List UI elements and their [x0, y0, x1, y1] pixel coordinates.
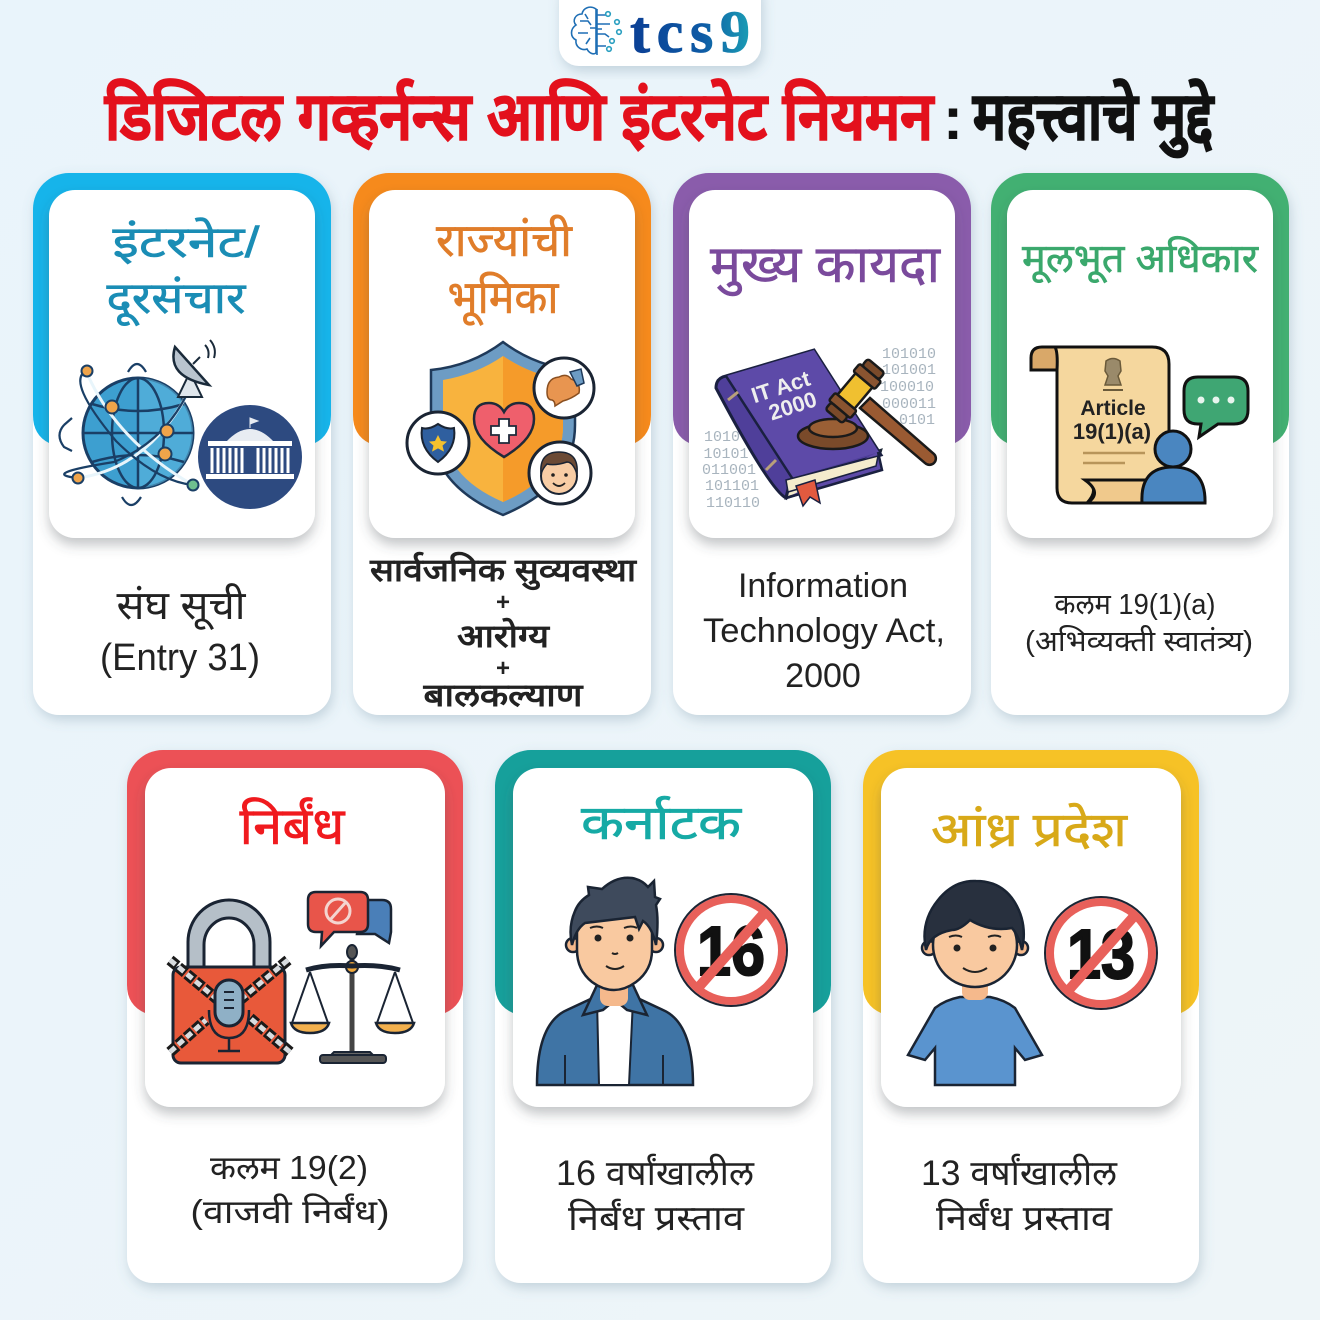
label: union list [100, 583, 260, 679]
title: : [943, 85, 963, 152]
icon: binary digits: 110110 [706, 495, 760, 512]
heading: internet telecom [106, 217, 260, 326]
icon: binary digits: 101010 [882, 346, 936, 363]
icon: binary digits: 101101 [705, 478, 759, 495]
heading: role of states: राज्यांची [436, 214, 573, 266]
icon: binary digits: 011001 [702, 462, 756, 479]
label: public order, health, child welfare [369, 551, 638, 713]
label: article 19(2) [190, 1149, 390, 1230]
icon: shield with heart [407, 342, 594, 515]
label: under 13 proposal: 13 वर्षांखालील [921, 1153, 1118, 1193]
heading: fundamental rights: मूलभूत अधिकार [1022, 236, 1259, 283]
icon: child [529, 442, 591, 504]
title: महत्त्वाचे मुद्दे [971, 78, 1215, 158]
panel: restrictions [127, 750, 463, 1283]
label: under 13 proposal: निर्बंध प्रस्ताव [936, 1198, 1113, 1238]
icon: speech bubble [1184, 377, 1248, 437]
label: under 16 proposal: 16 वर्षांखालील [556, 1153, 755, 1193]
icon: globe and satellite [60, 340, 215, 505]
icon: binary digits: 10101 [703, 446, 749, 463]
label: public order, health, child welfare: बालकल्याण [422, 677, 585, 713]
heading: restrictions: निर्बंध [240, 797, 346, 856]
icon: health [534, 358, 594, 418]
heading: role of states: भूमिका [448, 271, 560, 326]
icon: article scroll [1031, 347, 1169, 503]
logo [559, 0, 761, 66]
icon: article scroll: Article [1080, 397, 1146, 420]
icon: gavel [798, 357, 936, 465]
icon: police badge [407, 412, 469, 474]
icon: no under 16 [675, 894, 787, 1006]
icon: blocked speech bubbles [308, 892, 391, 946]
heading: internet telecom: दूरसंचार [106, 274, 247, 326]
title: डिजिटल गव्हर्नन्स आणि इंटरनेट नियमन [103, 78, 935, 153]
icon: law book [716, 350, 882, 506]
heading: andhra pradesh: आंध्र प्रदेश [931, 802, 1128, 857]
label: IT act: Technology Act, [703, 612, 945, 650]
label: public order, health, child welfare: सार्वजनिक सुव्यवस्था [369, 551, 638, 591]
label: under 13 proposal [921, 1153, 1118, 1238]
icon: law book: IT Act [748, 365, 814, 408]
label: public order, health, child welfare: आरोग्य [457, 617, 551, 654]
label: under 16 proposal: निर्बंध प्रस्ताव [568, 1198, 745, 1238]
label: IT act [703, 567, 945, 695]
label: article 19(1)(a) [1025, 589, 1253, 658]
icon: child [908, 881, 1042, 1085]
icon: parliament [198, 405, 302, 509]
heading: karnataka: कर्नाटक [581, 795, 742, 850]
icon: no under 16: 16 [697, 912, 765, 990]
icon: binary digits [702, 346, 936, 512]
icon: binary digits: 1010 [704, 429, 740, 446]
icon: binary digits: 000011 [882, 396, 936, 413]
icon: binary digits: 100010 [880, 379, 934, 396]
panel: andhra pradesh [863, 750, 1199, 1283]
label: article 19(2): (वाजवी निर्बंध) [190, 1193, 390, 1230]
panel: main law [673, 173, 971, 715]
icon: teenager [537, 878, 693, 1085]
heading: main law: मुख्य कायदा [710, 236, 942, 296]
label: article 19(1)(a): कलम 19(1)(a) [1054, 589, 1216, 621]
heading: internet telecom: इंटरनेट/ [112, 217, 260, 267]
heading: role of states [436, 214, 573, 326]
icon: article scroll: 19(1)(a) [1073, 419, 1151, 444]
label: public order, health, child welfare: + [496, 655, 510, 682]
label: article 19(2): कलम 19(2) [210, 1149, 368, 1186]
icon: chained padlock with microphone [170, 900, 290, 1063]
icon: person [1142, 431, 1205, 503]
panel: karnataka [495, 750, 831, 1283]
icon: law book: 2000 [766, 386, 820, 425]
label: public order, health, child welfare: + [496, 589, 510, 616]
panel: role of states [353, 173, 651, 715]
icon: binary digits: 0101 [899, 412, 935, 429]
label: under 16 proposal [556, 1153, 755, 1238]
panel: fundamental rights [991, 173, 1289, 715]
logo: tcs9 [630, 0, 750, 65]
label: IT act: 2000 [785, 657, 861, 695]
icon: no under 13 [1045, 897, 1157, 1009]
icon: no under 13: 13 [1067, 915, 1135, 993]
label: article 19(1)(a): (अभिव्यक्ती स्वातंत्र्य) [1025, 625, 1253, 658]
icon: scales of justice [291, 945, 414, 1063]
panel: internet / telecom [33, 173, 331, 715]
label: union list: (Entry 31) [100, 637, 260, 679]
label: union list: संघ सूची [116, 583, 246, 630]
label: IT act: Information [738, 567, 908, 605]
icon: binary digits: 101001 [882, 362, 936, 379]
